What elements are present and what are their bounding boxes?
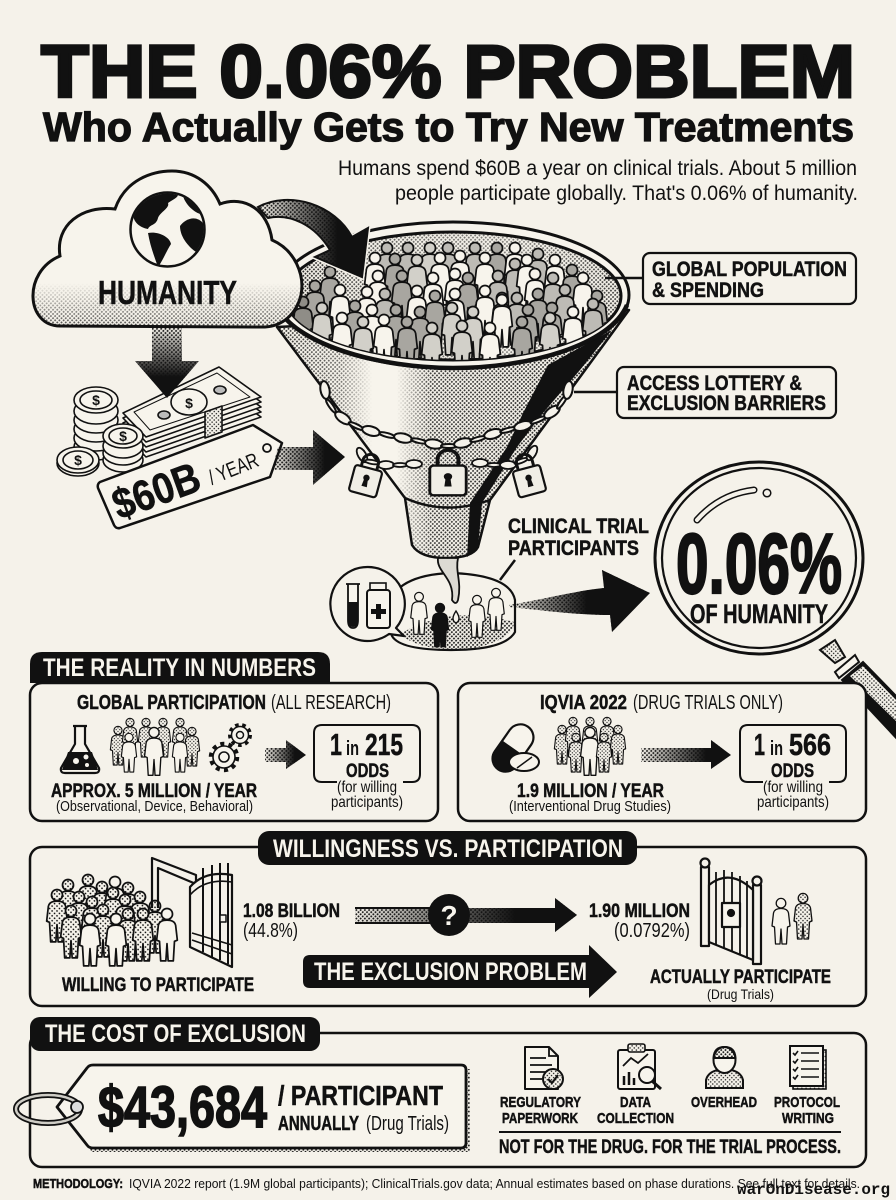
icon: closed gate [700, 858, 762, 964]
platform [387, 573, 515, 650]
intro text: Humans spend $60B a year on clinical trials. About 5 million [338, 157, 857, 180]
label: access lottery and exclusion barriers: ACCESS LOTTERY & [627, 372, 802, 395]
funnel interior [285, 232, 621, 360]
coin dollar signs: $ [74, 452, 82, 468]
label: global population and spending [605, 253, 856, 304]
arrow: money to funnel [272, 430, 345, 485]
icon: data collection [618, 1044, 661, 1089]
label: global population and spending: GLOBAL POPULATION [652, 258, 847, 281]
panel: IQVIA 2022 [458, 683, 866, 821]
panel heading: (ALL RESEARCH) [271, 692, 391, 714]
panel heading: IQVIA 2022 [540, 692, 627, 714]
section header: the reality in numbers: THE REALITY IN NUMBERS [43, 654, 316, 682]
drip [438, 558, 459, 603]
funnel shading [277, 310, 629, 558]
funnel rim [277, 222, 629, 368]
funnel black stripe [467, 330, 612, 557]
section header [30, 1017, 320, 1051]
annually: ANNUALLY [278, 1113, 359, 1135]
platform shading [400, 615, 514, 649]
icon: open gate [152, 858, 232, 967]
padlock right [509, 451, 546, 498]
magnifying glass: 0.06% of humanity [655, 462, 896, 742]
chain upper [319, 380, 574, 450]
stat: 1.08 billion [243, 901, 340, 942]
amount: $43,684 [98, 1075, 267, 1140]
icon: globe [130, 192, 205, 267]
arrow [265, 740, 306, 769]
methodology note: METHODOLOGY: [33, 1176, 123, 1191]
lens highlight [697, 490, 754, 520]
odds box: 1 in 215: 1 [330, 727, 342, 762]
icon: overhead [706, 1047, 743, 1088]
coin stack front [57, 424, 143, 476]
magnifier handle [820, 640, 896, 742]
tag shadow [60, 1069, 470, 1152]
of humanity: OF HUMANITY [690, 599, 828, 629]
panel: willingness vs participation [30, 831, 866, 1006]
subtitle: Who Actually Gets to Try New Treatments [43, 104, 854, 150]
price tag: $60B per year [98, 425, 282, 529]
label: global population and spending: & SPENDING [652, 279, 764, 302]
stat note: (Interventional Drug Studies) [509, 798, 671, 815]
price tag: $60B per year: $60B [106, 454, 207, 529]
bubble with test tube and bottle [330, 567, 405, 641]
cost labels [500, 1094, 840, 1127]
per participant: / PARTICIPANT [278, 1080, 443, 1111]
arrow with question mark [355, 894, 577, 936]
icon: gears [211, 725, 250, 770]
label: clinical trial participants: PARTICIPANTS [508, 537, 639, 560]
panel heading: (DRUG TRIALS ONLY) [633, 692, 783, 714]
stat: 1.90 million: 1.90 MILLION [589, 901, 690, 922]
odds box: 1 in 215 [314, 725, 420, 811]
funnel [277, 222, 629, 558]
label: clinical trial participants: CLINICAL TRIAL [508, 515, 649, 538]
stat: 1.9 million per year: 1.9 MILLION / YEAR [517, 781, 664, 802]
label: access lottery and exclusion barriers: EXCLUSION BARRIERS [627, 392, 826, 415]
cloud shape [33, 171, 302, 327]
arrow [641, 740, 731, 769]
section header: THE COST OF EXCLUSION [45, 1020, 306, 1048]
odds box: 1 in 566: participants) [757, 794, 829, 811]
padlock center [430, 450, 466, 495]
odds box: 1 in 215: (for willing [337, 779, 397, 796]
odds box: 1 in 566: (for willing [763, 779, 823, 796]
willing crowd [47, 874, 177, 966]
note: drug trials: (Drug Trials) [707, 986, 774, 1002]
stat: 1.08 billion: (44.8%) [243, 920, 298, 942]
panel: global participation [30, 683, 438, 821]
section header: WILLINGNESS VS. PARTICIPATION [273, 835, 623, 863]
odds box: 1 in 215: ODDS [346, 761, 389, 782]
coin dollar signs: $ [92, 392, 100, 408]
stat: 1.90 million [589, 901, 690, 942]
cloud shading [34, 286, 300, 326]
intro text: people participate globally. That's 0.06% of humanity. [395, 182, 858, 205]
coin dollar signs: $ [185, 395, 193, 411]
arrow with question mark: ? [440, 900, 458, 931]
icon: pills [487, 719, 539, 777]
intro text [338, 157, 858, 205]
icon: protocol writing [790, 1046, 826, 1089]
odds box: 1 in 215: in [346, 738, 359, 760]
icon: people group [110, 718, 200, 775]
cost labels: WRITING [782, 1110, 834, 1127]
clinical trial participants pool [330, 558, 515, 650]
watermark: warOnDisease.org [737, 1181, 890, 1199]
funnel body [277, 310, 629, 558]
money stack and coins [57, 367, 261, 476]
crowd in funnel [294, 242, 608, 360]
panel heading [540, 692, 783, 714]
coin dollar signs [74, 392, 193, 468]
arrow: participants to magnifier [509, 570, 650, 632]
cost labels: PROTOCOL [774, 1094, 840, 1111]
tag string [16, 1095, 80, 1123]
coin stack back [74, 387, 118, 460]
price tag: cost per participant [16, 1065, 470, 1152]
cloud: humanity [33, 171, 302, 327]
icon: people group [554, 717, 626, 775]
label: clinical trial participants [500, 515, 649, 580]
title: THE 0.06% PROBLEM [41, 30, 855, 113]
cost labels: DATA [620, 1094, 651, 1111]
two participants [772, 893, 812, 944]
rim lower edge [279, 305, 627, 368]
lens inner ring [662, 468, 856, 648]
methodology note: IQVIA 2022 report (1.9M global participants); ClinicalTrials.gov data; Annual estimates based on phase durations. See full text for details. [129, 1176, 860, 1191]
icon: regulatory paperwork [525, 1047, 563, 1089]
drug trials note: (Drug Trials) [366, 1113, 449, 1135]
funnel interior dots [286, 233, 620, 359]
panel heading: GLOBAL PARTICIPATION [77, 692, 266, 714]
stat: 1.08 billion: 1.08 BILLION [243, 901, 340, 922]
arrow: the exclusion problem: THE EXCLUSION PROBLEM [314, 958, 587, 986]
odds box: 1 in 566: in [770, 738, 783, 760]
label: humanity: HUMANITY [98, 274, 237, 311]
odds box: 1 in 566: 566 [789, 727, 831, 762]
label: willing to participate: WILLING TO PARTICIPATE [62, 975, 254, 996]
droplet [453, 611, 459, 623]
odds box: 1 in 566: 1 [754, 727, 765, 762]
banknote stack [123, 367, 261, 457]
curved arrow to funnel [258, 200, 368, 277]
lens [655, 462, 863, 654]
label: actually participate: ACTUALLY PARTICIPATE [650, 967, 831, 988]
coin dollar signs: $ [119, 428, 127, 444]
stat: approx 5 million per year: APPROX. 5 MILLION / YEAR [51, 781, 257, 802]
arrow: the exclusion problem [303, 945, 617, 998]
cost labels: COLLECTION [597, 1110, 674, 1127]
neck collar [405, 498, 490, 508]
cost labels: PAPERWORK [502, 1110, 578, 1127]
tag hole [71, 1101, 83, 1113]
price tag: $60B per year: / YEAR [205, 449, 262, 490]
tag body [57, 1065, 466, 1148]
label: access lottery and exclusion barriers [574, 367, 836, 418]
stat: 1.90 million: (0.0792%) [614, 920, 690, 942]
odds box: 1 in 566: ODDS [771, 761, 814, 782]
panel: the cost of exclusion [16, 1017, 866, 1167]
odds box: 1 in 215: participants) [331, 794, 403, 811]
chain lower [355, 444, 539, 469]
padlock left [349, 451, 386, 498]
cost labels: REGULATORY [500, 1094, 581, 1111]
icon: flask [61, 726, 99, 773]
odds box: 1 in 566 [740, 725, 846, 811]
odds box: 1 in 215: 215 [365, 727, 403, 762]
stat note: (Observational, Device, Behavioral) [56, 798, 253, 815]
arrow: humanity to money [135, 327, 199, 398]
cost labels: OVERHEAD [691, 1094, 757, 1111]
participants [411, 588, 504, 647]
